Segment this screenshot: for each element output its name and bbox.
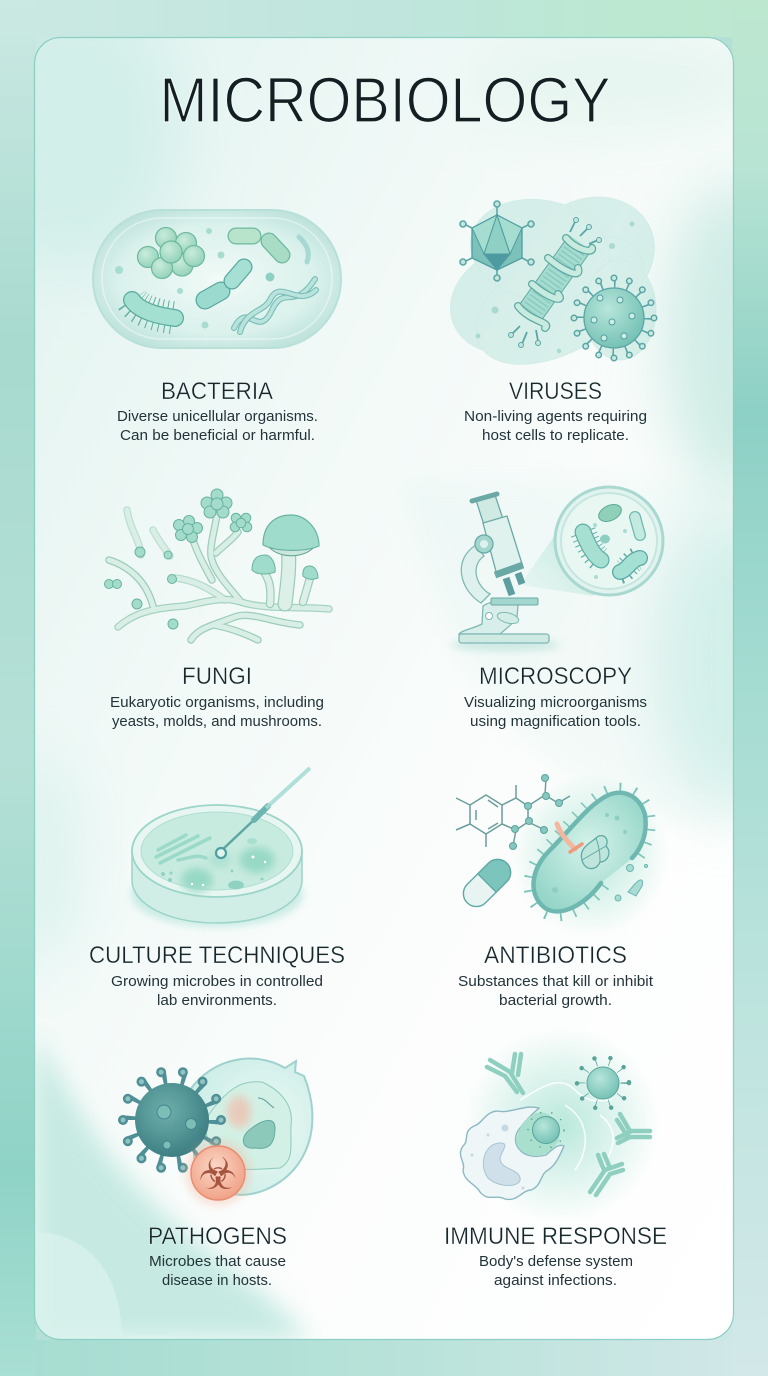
- description: bacteria: Diverse unicellular organisms.: [117, 408, 318, 425]
- panel: pathogens: [123, 1059, 312, 1289]
- heading: pathogens: PATHOGENS: [148, 1223, 287, 1250]
- description: pathogens: Microbes that cause: [149, 1253, 286, 1270]
- panel: viruses: [435, 176, 673, 444]
- title: MICROBIOLOGY: [160, 64, 610, 136]
- description: microscopy: [464, 694, 647, 730]
- panel: culture techniques: [89, 768, 345, 1009]
- description: fungi: Eukaryotic organisms, including: [110, 694, 324, 711]
- icon: antibiotic molecule, capsule and bacterium: [456, 773, 668, 937]
- panel: antibiotics: [456, 773, 668, 1009]
- description: viruses: Non-living agents requiring: [464, 408, 647, 425]
- icon: viruses: [435, 176, 673, 391]
- heading: microscopy: MICROSCOPY: [479, 663, 632, 690]
- description: culture techniques: Growing microbes in controlled: [111, 973, 323, 990]
- description: viruses: [464, 408, 647, 444]
- description: bacteria: [117, 408, 318, 444]
- description: antibiotics: bacterial growth.: [499, 992, 612, 1009]
- heading: culture techniques: CULTURE TECHNIQUES: [89, 942, 345, 969]
- panel: fungi: [104, 489, 329, 730]
- description: antibiotics: Substances that kill or inhibit: [458, 973, 654, 990]
- icon: bacteria capsule: [93, 210, 341, 348]
- heading: bacteria: BACTERIA: [161, 378, 273, 405]
- icon: microscope and lens: [450, 487, 663, 651]
- description: pathogens: disease in hosts.: [162, 1272, 272, 1289]
- description: immune response: [479, 1253, 633, 1289]
- description: pathogens: [149, 1253, 286, 1289]
- description: microscopy: Visualizing microorganisms: [464, 694, 647, 711]
- icon: virus infecting cell with biohazard badge: [123, 1059, 312, 1206]
- description: bacteria: Can be beneficial or harmful.: [120, 427, 315, 444]
- heading: fungi: FUNGI: [182, 663, 252, 690]
- icon: petri dish: [131, 768, 310, 927]
- heading: viruses: VIRUSES: [509, 378, 602, 405]
- description: antibiotics: [458, 973, 654, 1009]
- description: immune response: Body's defense system: [479, 1253, 633, 1270]
- icon: immune cell engulfing virus with antibodies: [460, 1027, 660, 1223]
- description: viruses: host cells to replicate.: [482, 427, 629, 444]
- panel: immune response: [444, 1027, 667, 1289]
- heading: antibiotics: ANTIBIOTICS: [484, 942, 627, 969]
- description: fungi: yeasts, molds, and mushrooms.: [112, 713, 322, 730]
- description: immune response: against infections.: [494, 1272, 617, 1289]
- panel: microscopy: [450, 487, 663, 730]
- description: fungi: [110, 694, 324, 730]
- icon: fungi: [104, 489, 329, 640]
- panel: bacteria: [93, 210, 341, 444]
- heading: immune response: IMMUNE RESPONSE: [444, 1223, 667, 1250]
- description: culture techniques: lab environments.: [157, 992, 277, 1009]
- description: microscopy: using magnification tools.: [470, 713, 641, 730]
- icon: biohazard glyph: ☣: [198, 1149, 238, 1200]
- description: culture techniques: [111, 973, 323, 1009]
- icon: antibodies: [487, 1054, 650, 1195]
